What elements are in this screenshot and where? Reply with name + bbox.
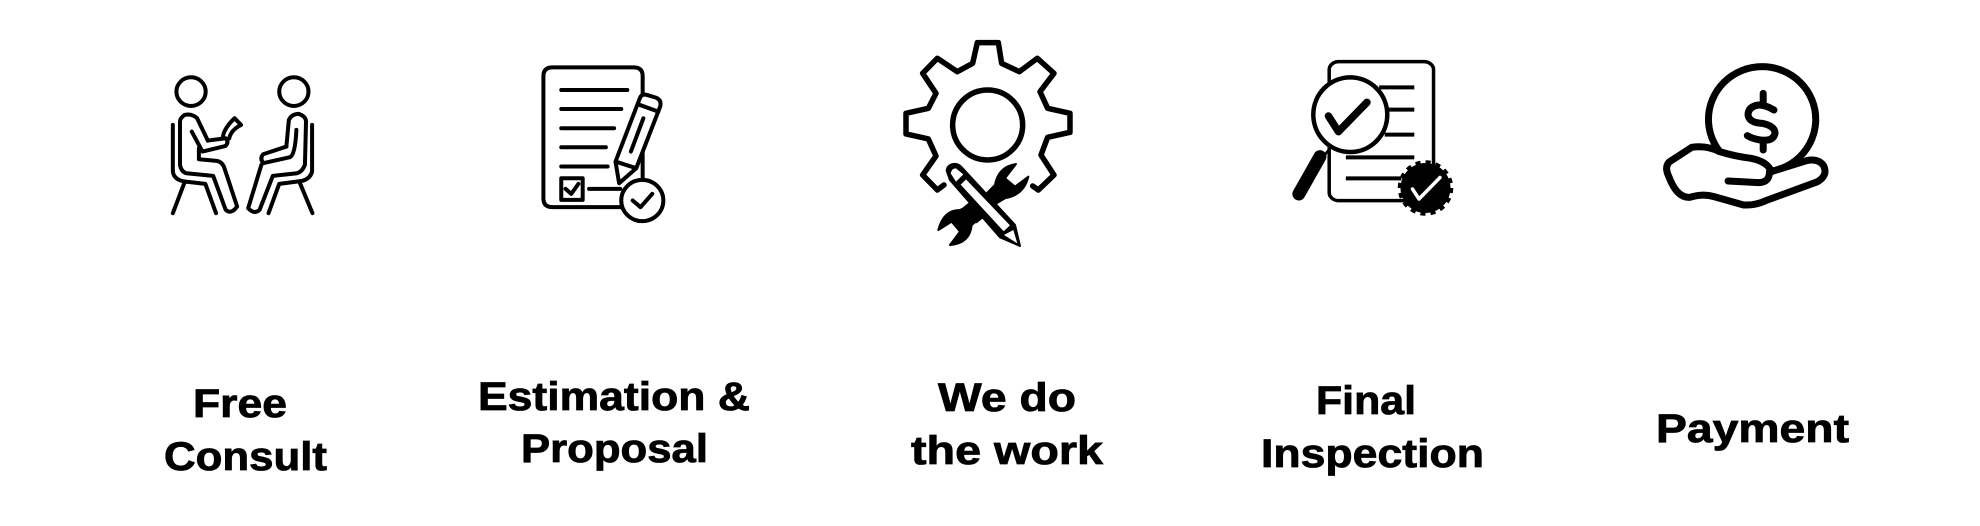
label: Final Inspection: [1261, 379, 1484, 476]
label: Payment: Payment: [1656, 407, 1849, 451]
label: Free Consult: Consult: [164, 435, 327, 479]
icon: gear with wrench and pencil: [906, 43, 1070, 246]
label: Estimation & Proposal: Estimation &: [478, 375, 750, 419]
icon: hand holding dollar coin: [1667, 67, 1825, 205]
label: Estimation & Proposal: Proposal: [521, 427, 708, 471]
label: We do the work: the work: [911, 429, 1104, 473]
icon: two people consulting: [173, 77, 312, 213]
label: Free Consult: Free: [193, 382, 287, 426]
label: Final Inspection: Final: [1316, 379, 1416, 423]
verified badge: [1400, 162, 1452, 214]
document and magnifier: [1299, 62, 1434, 201]
label: Estimation & Proposal: [478, 375, 750, 471]
icon: magnifier over document with badge: [1299, 62, 1452, 214]
icon: document with pencil and check: [543, 67, 663, 221]
label: Free Consult: [164, 382, 327, 479]
label: We do the work: We do: [938, 376, 1076, 420]
label: We do the work: [911, 376, 1104, 473]
label: Final Inspection: Inspection: [1261, 432, 1484, 476]
